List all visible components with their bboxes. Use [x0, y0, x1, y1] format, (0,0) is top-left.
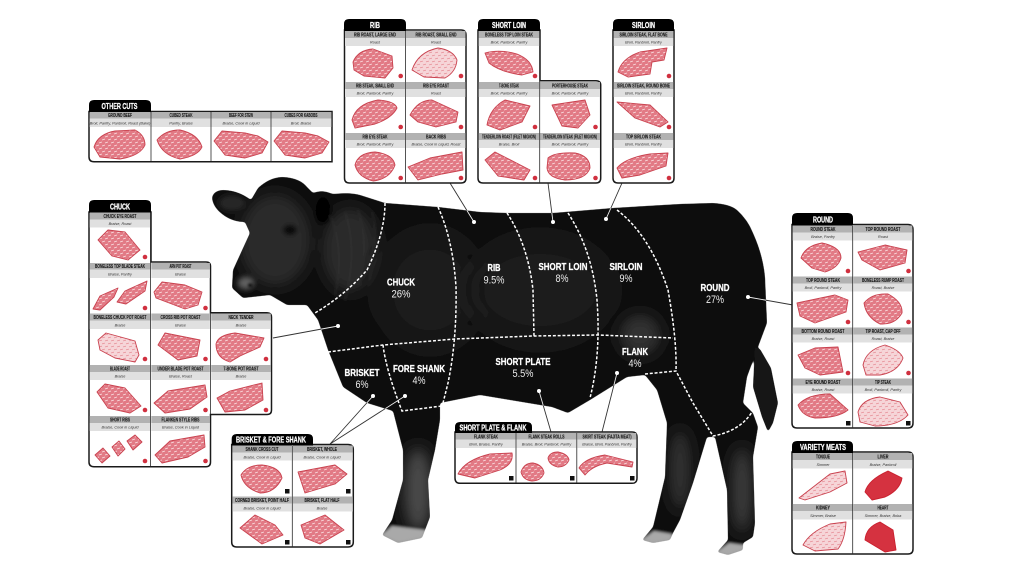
cell: flanken style ribs	[151, 416, 210, 463]
cell: 7-bone pot roast	[211, 365, 271, 412]
label: round: 27%	[706, 294, 724, 306]
cell: cubed steak	[151, 112, 211, 159]
cell: tip roast cap off: Roast, Braise	[872, 337, 894, 341]
label: short plate	[496, 356, 550, 380]
cell: flank steak	[456, 433, 516, 480]
cell: round steak: ROUND STEAK	[810, 227, 836, 233]
label: sirloin	[610, 261, 642, 285]
cell: heart: HEART	[878, 506, 889, 512]
cell: tenderloin steak: TENDERLOIN STEAK (FILET MIGNON)	[543, 134, 597, 140]
cell: shank cross cut: SHANK CROSS CUT	[246, 447, 279, 453]
label: fore shank: 4%	[412, 375, 426, 387]
cell: rib eye roast	[406, 82, 466, 129]
cow body with shading, hooves and tail	[212, 177, 778, 555]
label: flank: 4%	[628, 358, 642, 370]
label: fore shank: FORE SHANK	[393, 363, 445, 375]
cell: blade roast	[90, 365, 150, 413]
cell: rib roast large end: Roast	[370, 40, 381, 44]
panel: variety meats: VARIETY MEATS	[800, 443, 846, 452]
label: short loin	[538, 261, 588, 285]
cell: tenderloin steak: Broil, Panbroil, Panfry	[552, 142, 589, 146]
cell: boneless rump roast: BONELESS RUMP ROAST	[862, 278, 905, 284]
cell: porterhouse steak: Broil, Panbroil, Panfry	[552, 92, 589, 96]
cell: tongue	[793, 453, 853, 500]
cell: t-bone steak: Broil, Panbroil, Panfry	[491, 92, 528, 96]
cell: flanken style ribs: Braise, Cook in Liquid	[162, 426, 200, 430]
cell: tip steak: TIP STEAK	[875, 380, 891, 386]
cell: cubes for kabobs: Broil, Braise	[291, 122, 311, 126]
cell: tip steak: Broil, Panbroil, Panfry	[865, 388, 902, 392]
cell: top sirloin steak: TOP SIRLOIN STEAK	[626, 134, 661, 140]
leader dots	[336, 217, 750, 398]
panel: chuck: CHUCK	[110, 202, 130, 212]
panel: variety meats	[792, 441, 913, 554]
label: brisket: BRISKET	[344, 367, 380, 379]
cell: brisket flat half: Braise	[317, 506, 327, 510]
cell: beef for stew: BEEF FOR STEW	[229, 113, 253, 119]
cell: flank steak rolls: FLANK STEAK ROLLS	[528, 434, 565, 440]
cell: rib roast small end: RIB ROAST, SMALL END	[416, 32, 457, 38]
cell: chuck eye roast	[90, 212, 150, 260]
cell: corned brisket point half	[232, 496, 292, 544]
cell: bottom round roast	[793, 328, 853, 375]
cell: boneless top loin steak	[479, 31, 539, 78]
cell: cubes for kabobs	[271, 112, 331, 158]
cell: neck tender: NECK TENDER	[228, 315, 254, 321]
cell: rib steak small end: RIB STEAK, SMALL END	[356, 84, 394, 90]
cell: sirloin steak round bone: Broil, Panbroil, Panfry	[625, 92, 663, 96]
cell: boneless rump roast	[853, 276, 912, 324]
cell: beef for stew	[211, 112, 271, 158]
label: rib: 9.5%	[484, 275, 505, 287]
cell: round steak: Braise, Panfry	[811, 235, 836, 239]
cell: kidney	[793, 504, 853, 551]
cell: short ribs: SHORT RIBS	[110, 418, 130, 424]
label: round	[700, 282, 730, 306]
cell: heart	[853, 504, 912, 552]
label: fore shank	[393, 363, 445, 387]
cell: boneless chuck pot roast: Braise	[115, 324, 125, 328]
cell: 7-bone pot roast: 7-BONE POT ROAST	[224, 366, 259, 372]
label: rib	[484, 262, 505, 287]
label: chuck: CHUCK	[387, 277, 415, 289]
label: short loin: 8%	[556, 273, 569, 285]
cell: ground beef: Broil, Panfry, Panbroil, Roast (Bake)	[90, 122, 151, 126]
label: brisket: 6%	[356, 379, 369, 391]
cell: arm pot roast: Braise	[175, 272, 186, 276]
cell: top sirloin steak: Broil, Panbroil, Panfry	[625, 142, 663, 146]
cell: top round steak: TOP ROUND STEAK	[806, 278, 840, 284]
cell: rib roast large end	[345, 31, 405, 78]
cell: flank steak: FLANK STEAK	[474, 434, 498, 440]
cell: neck tender: Braise	[236, 324, 246, 328]
cell: rib eye steak: Broil, Panbroil, Panfry	[357, 142, 394, 146]
cell: rib steak small end: Broil, Panbroil, Panfry	[357, 92, 394, 96]
cell: top round roast	[853, 226, 912, 273]
cell: cubes for kabobs: CUBES FOR KABOBS	[284, 113, 318, 119]
cell: sirloin steak flat bone: SIRLOIN STEAK, FLAT BONE	[620, 32, 668, 38]
label: short plate: SHORT PLATE	[496, 356, 550, 368]
leader lines outside the cow	[273, 183, 793, 444]
cell: chuck eye roast: CHUCK EYE ROAST	[104, 214, 137, 220]
cell: rib roast small end	[406, 31, 466, 78]
label: short loin: SHORT LOIN	[538, 261, 588, 273]
cell: flank steak rolls: Braise, Broil, Panbroil, Panfry	[522, 442, 572, 446]
label: chuck	[387, 277, 415, 301]
cell: liver: Braise, Panbroil	[870, 463, 897, 467]
panel: rib	[344, 19, 466, 183]
cell: rib roast small end: Roast	[431, 40, 442, 44]
cell: brisket whole	[293, 446, 353, 494]
label: brisket	[344, 367, 380, 391]
panel: chuck	[89, 200, 272, 467]
cell: 7-bone pot roast: Braise	[236, 374, 246, 378]
cell: brisket flat half	[293, 496, 353, 544]
cell: rib eye steak	[345, 133, 405, 181]
cell: liver	[853, 453, 912, 500]
cell: porterhouse steak: PORTERHOUSE STEAK	[552, 84, 588, 90]
cell: rib roast large end: RIB ROAST, LARGE END	[354, 32, 396, 38]
cell: boneless top loin steak: BONELESS TOP LOIN STEAK	[485, 32, 533, 38]
cell: tongue: Simmer	[816, 463, 830, 467]
cell: boneless top blade steak: BONELESS TOP BLADE STEAK	[95, 264, 145, 270]
cell: rib eye roast: RIB EYE ROAST	[423, 84, 450, 90]
label: flank	[622, 346, 648, 370]
cell: boneless top blade steak: Braise, Panfry	[108, 272, 133, 276]
cell: rib eye roast: Roast	[431, 92, 442, 96]
cell: kidney: Simmer, Braise	[810, 514, 836, 518]
cell: cubed steak: CUBED STEAK	[170, 113, 193, 119]
cell: arm pot roast	[151, 263, 210, 310]
panel: short plate and flank	[455, 422, 637, 483]
label: sirloin: SIRLOIN	[610, 261, 642, 273]
cell: boneless chuck pot roast: BONELESS CHUCK POT ROAST	[94, 315, 147, 321]
cell: eye round roast: Braise, Roast	[812, 388, 835, 392]
cell: liver: LIVER	[878, 454, 889, 460]
cell: boneless top loin steak: Broil, Panbroil, Panfry	[491, 40, 528, 44]
cell: brisket whole: BRISKET, WHOLE	[307, 447, 337, 453]
cell: top sirloin steak	[614, 133, 673, 180]
cell: blade roast: Braise	[115, 374, 125, 378]
cell: cross rib pot roast	[151, 314, 210, 361]
cell: top round steak: Broil, Panbroil, Panfry	[805, 286, 842, 290]
label: flank: FLANK	[622, 346, 648, 358]
cell: bottom round roast: Braise, Roast	[812, 337, 835, 341]
cell: back ribs: Braise, Cook in Liquid, Roast	[412, 142, 461, 146]
panel: short loin: SHORT LOIN	[492, 21, 526, 30]
cell: arm pot roast: ARM POT ROAST	[170, 264, 192, 270]
cell: tongue: TONGUE	[816, 454, 830, 460]
label: round: ROUND	[700, 282, 730, 294]
cell: corned brisket point half: CORNED BRISKET, POINT HALF	[235, 498, 289, 504]
cell: back ribs: BACK RIBS	[426, 134, 446, 140]
cell: shank cross cut: Braise, Cook in Liquid	[244, 456, 281, 460]
cell: rib eye steak: RIB EYE STEAK	[362, 134, 388, 140]
cell: cross rib pot roast: CROSS RIB POT ROAST	[160, 315, 201, 321]
panel: sirloin	[613, 19, 674, 183]
cell: neck tender	[211, 314, 271, 362]
cell: chuck eye roast: Braise, Roast	[109, 222, 132, 226]
cell: skirt steak: SKIRT STEAK (FAJITA MEAT)	[582, 434, 632, 440]
cell: tenderloin roast: Braise, Broil	[499, 142, 519, 146]
panel: rib: RIB	[370, 21, 380, 30]
label: chuck: 26%	[392, 289, 411, 301]
cell: porterhouse steak	[540, 82, 600, 129]
cell: sirloin steak flat bone: Broil, Panbroil, Panfry	[625, 40, 663, 44]
cell: cross rib pot roast: Braise	[175, 324, 186, 328]
cell: tenderloin steak	[540, 133, 600, 180]
panel: sirloin: SIRLOIN	[632, 21, 655, 30]
cell: cubed steak: Panfry, Braise	[169, 122, 193, 126]
cell: short ribs	[90, 416, 150, 463]
cell: under blade pot roast	[151, 365, 210, 413]
panel: short loin	[478, 19, 601, 183]
cell: eye round roast	[793, 378, 853, 426]
cell: rib steak small end	[345, 82, 405, 129]
cell: top round steak	[793, 276, 853, 324]
cell: brisket whole: Braise, Cook in Liquid	[304, 456, 341, 460]
cell: tip steak	[853, 378, 912, 426]
cell: eye round roast: EYE ROUND ROAST	[806, 380, 841, 386]
leader lines inside the cow	[320, 208, 766, 409]
cell: heart: Simmer, Braise, Boba	[865, 514, 901, 518]
cell: short ribs: Braise, Cook in Liquid	[102, 426, 139, 430]
cell: tip roast cap off	[853, 328, 912, 375]
cell: top round roast: Roast	[878, 235, 889, 239]
label: short plate: 5.5%	[512, 368, 534, 380]
cell: skirt steak	[577, 433, 636, 480]
cell: top round roast: TOP ROUND ROAST	[866, 227, 901, 233]
cell: sirloin steak round bone: SIRLOIN STEAK, ROUND BONE	[617, 84, 670, 90]
panel: other cuts: OTHER CUTS	[102, 102, 138, 111]
panel: round	[792, 213, 913, 428]
cell: skirt steak: Braise, Broil, Panbroil, Panfry	[582, 442, 633, 446]
panel: brisket and fore shank	[232, 434, 353, 547]
cell: boneless rump roast: Roast, Braise	[872, 286, 894, 290]
cell: bottom round roast: BOTTOM ROUND ROAST	[802, 329, 845, 335]
cow illustration with cut map	[212, 177, 793, 555]
cell: brisket flat half: BRISKET, FLAT HALF	[304, 498, 340, 504]
cell: beef for stew: Braise, Cook in Liquid	[223, 122, 260, 126]
cell: t-bone steak: T-BONE STEAK	[499, 84, 519, 90]
panel: round: ROUND	[813, 216, 833, 224]
cell: tip roast cap off: TIP ROAST, CAP OFF	[866, 329, 900, 335]
cell: flanken style ribs: FLANKEN STYLE RIBS	[162, 418, 200, 424]
cell: tenderloin roast: TENDERLOIN ROAST (FILET MIGNON)	[482, 134, 536, 140]
cut boundary dashes	[315, 203, 752, 436]
cell: ground beef	[90, 112, 151, 159]
cell: shank cross cut	[232, 446, 292, 494]
cell: tenderloin roast	[479, 133, 539, 180]
panel: brisket and fore shank: BRISKET & FORE SHANK	[236, 436, 306, 444]
panel: other cuts	[89, 100, 332, 162]
label: rib: RIB	[488, 262, 501, 274]
cell: sirloin steak flat bone	[614, 31, 673, 78]
cell: round steak	[793, 226, 853, 273]
cell: t-bone steak	[479, 82, 539, 130]
label: sirloin: 9%	[620, 273, 633, 285]
cell: flank steak: Broil, Braise, Panfry	[469, 442, 504, 446]
cell: under blade pot roast: UNDER BLADE POT ROAST	[158, 366, 204, 372]
cell: ground beef: GROUND BEEF	[108, 113, 132, 119]
cell: flank steak rolls	[516, 433, 576, 481]
cell: boneless top blade steak	[90, 263, 150, 310]
cell: back ribs	[406, 133, 466, 180]
cell: under blade pot roast: Braise, Roast	[169, 374, 193, 378]
cell: sirloin steak round bone	[614, 82, 673, 129]
cell: corned brisket point half: Braise, Cook in Liquid	[244, 506, 281, 510]
panel: short plate and flank: SHORT PLATE & FLANK	[460, 424, 527, 432]
cell: boneless chuck pot roast	[90, 314, 150, 362]
cell: kidney: KIDNEY	[816, 506, 830, 512]
cell: blade roast: BLADE ROAST	[110, 366, 130, 372]
